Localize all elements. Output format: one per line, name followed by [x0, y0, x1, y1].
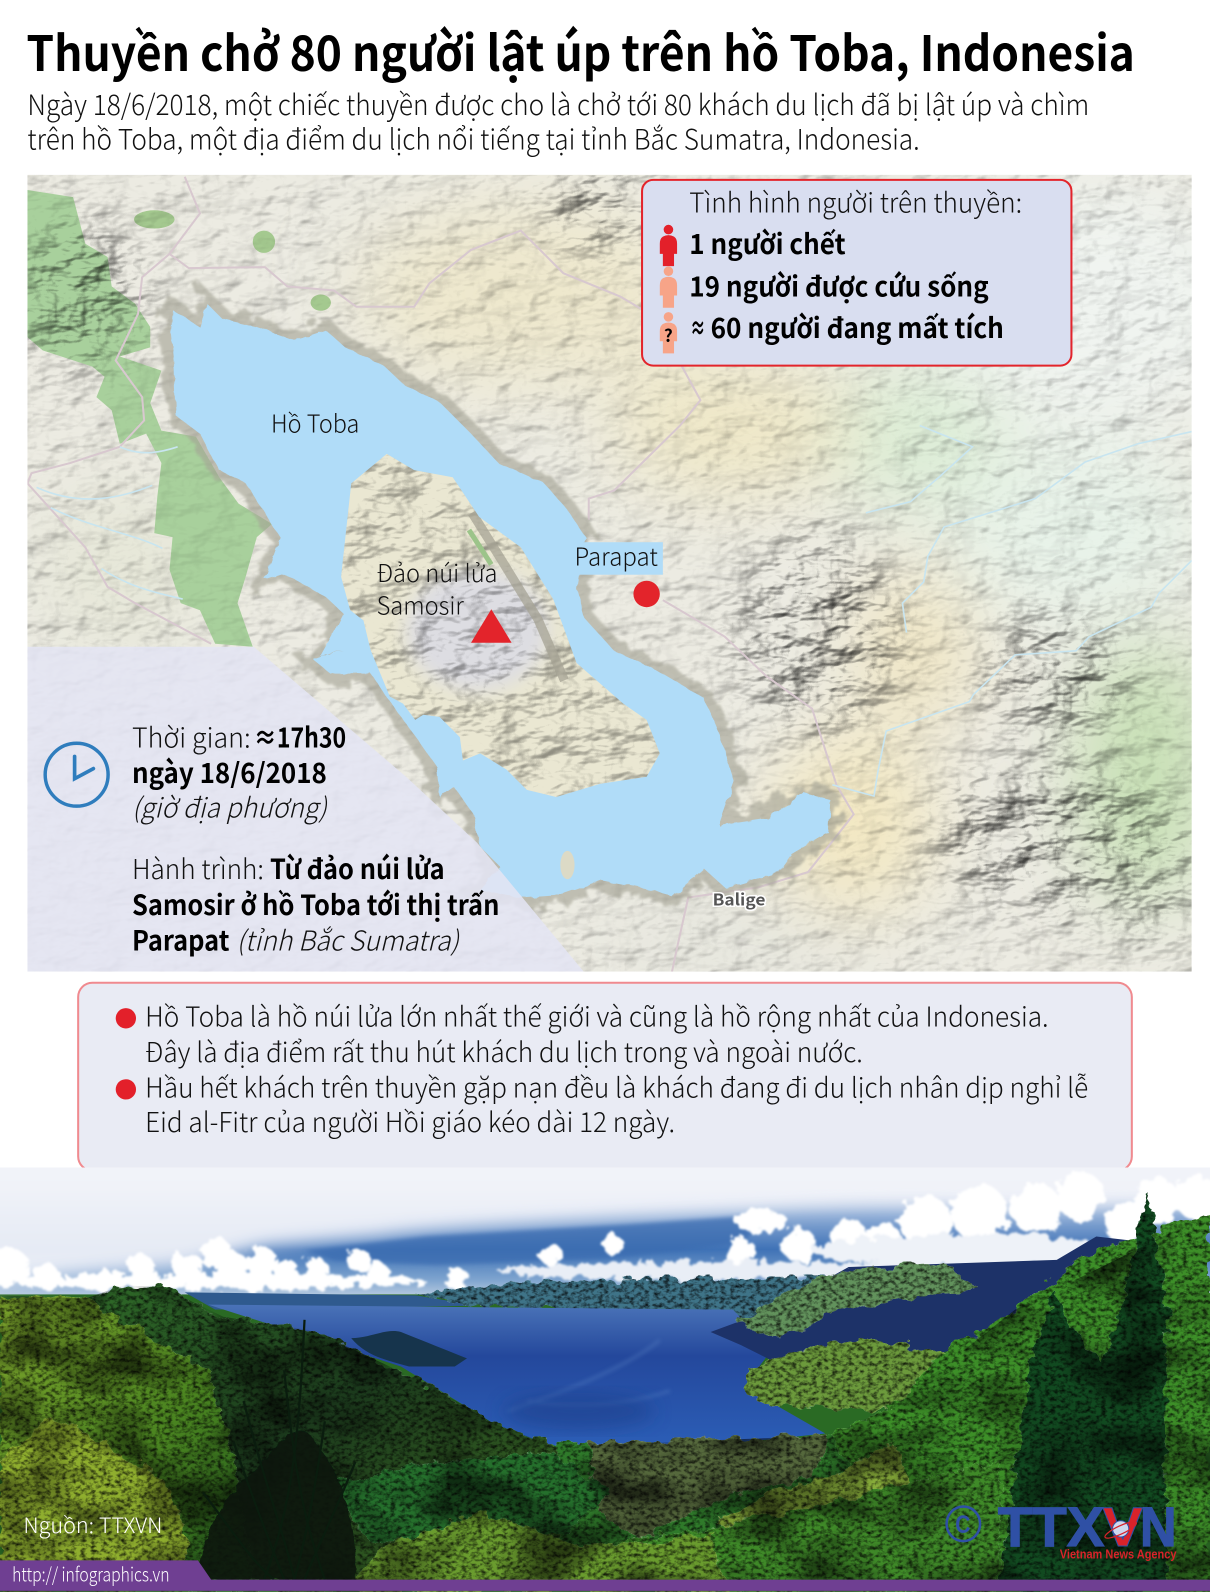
left dark hill — [92, 1285, 568, 1592]
stat: about 60 missing: ≈ — [690, 306, 705, 346]
icon: Parapat marker — [633, 581, 660, 607]
left bright hill — [0, 1295, 254, 1592]
route details: Samosir ở hồ Toba tới thị trấn — [132, 883, 499, 923]
roads — [27, 177, 854, 972]
logo: TTXVN: TTX — [998, 1495, 1104, 1558]
logo: TTXVN: N — [1140, 1495, 1177, 1558]
map label: Hồ Toba: Hồ Toba — [271, 406, 359, 441]
fact: world's largest volcanic lake: Hồ Toba là hồ núi lửa lớn nhất thế giới và cũng là hồ rộng nhất của Indonesia. — [145, 994, 1049, 1034]
intro text: Ngày 18/6/2018, một chiếc thuyền được cho là chở tới 80 khách du lịch đã bị lật úp và chìm — [27, 83, 1089, 124]
upper cloud bank — [0, 1168, 1210, 1299]
icon: missing person: ? — [664, 322, 673, 347]
panel heading: Tình hình người trên thuyền: — [689, 180, 1022, 220]
time details: ≈17h30 — [254, 715, 346, 755]
small headland — [351, 1331, 467, 1366]
dark trees on the right — [1000, 1193, 1167, 1592]
valley and village — [551, 1434, 850, 1547]
fact: tourists during Eid al-Fitr: Eid al-Fitr của người Hồi giáo kéo dài 12 ngày. — [145, 1100, 675, 1140]
logo: TTXVN — [947, 1495, 1177, 1561]
panel: people on the boat — [642, 180, 1071, 366]
route details: Từ đảo núi lửa — [270, 847, 445, 887]
fact: tourists during Eid al-Fitr — [145, 1065, 1088, 1140]
icon: dead person — [660, 225, 677, 266]
route details: Hành trình: — [132, 847, 264, 887]
middle green patch — [335, 1452, 609, 1543]
yellow foreground grass — [0, 1416, 188, 1580]
website: http:// infographics.vn — [12, 1560, 170, 1588]
lake surface — [208, 1305, 825, 1452]
bright slope — [714, 1442, 914, 1533]
green hill — [744, 1337, 941, 1411]
fact: tourists during Eid al-Fitr: Hầu hết khách trên thuyền gặp nạn đều là khách đang đi du lịch nhân dịp nghỉ lễ — [145, 1065, 1088, 1105]
icon: missing person — [660, 312, 677, 353]
green ridge — [345, 1513, 731, 1592]
time details: (giờ địa phương) — [132, 785, 328, 825]
icon: rescued person — [660, 266, 677, 308]
time details: Thời gian: — [132, 715, 251, 755]
right dark mountains — [711, 1237, 1132, 1360]
Samosir island — [335, 447, 670, 802]
ground shading — [0, 1208, 1210, 1592]
map label: Samosir volcanic island — [377, 555, 497, 622]
route details — [132, 847, 499, 958]
title: Thuyền chở 80 người lật úp trên hồ Toba, Indonesia — [26, 15, 1135, 86]
route details: Parapat — [132, 918, 230, 958]
lake — [171, 304, 830, 898]
source credit: Nguồn: TTXVN — [23, 1509, 162, 1540]
right forest — [812, 1213, 1210, 1592]
Parapat label background — [580, 542, 663, 575]
icon: red triangle volcano — [471, 609, 512, 643]
icon: clock — [45, 743, 108, 806]
rivers — [37, 425, 1192, 796]
grass blades — [203, 1320, 355, 1580]
footer bar — [0, 1560, 1210, 1591]
clouds — [0, 1172, 1210, 1291]
lower green slope — [568, 1462, 1000, 1592]
logo: TTXVN: V — [1102, 1495, 1143, 1558]
lower-left info overlay — [27, 647, 584, 972]
map label: Balige: Balige — [713, 887, 765, 911]
map label: Samosir volcanic island: Đảo núi lửa — [377, 555, 497, 590]
time details — [132, 715, 346, 825]
green forest zone — [27, 190, 331, 647]
small islet — [560, 851, 575, 879]
map label: Samosir volcanic island: Samosir — [377, 587, 464, 622]
bullet — [116, 1008, 136, 1028]
panel: lake facts — [78, 983, 1132, 1171]
dark bush silhouette — [198, 1431, 355, 1580]
map of Lake Toba — [27, 175, 1210, 985]
map label: Parapat: Parapat — [575, 539, 658, 574]
intro text: trên hồ Toba, một địa điểm du lịch nổi tiếng tại tỉnh Bắc Sumatra, Indonesia. — [27, 117, 920, 158]
logo: TTXVN: Vietnam News Agency — [1060, 1546, 1177, 1561]
blue sky patch — [305, 1214, 771, 1265]
stat: about 60 missing: 60 người đang mất tích — [711, 306, 1004, 346]
stat: 19 rescued: 19 người được cứu sống — [689, 265, 989, 305]
village houses — [589, 1436, 827, 1538]
lake shore relief — [171, 304, 830, 898]
photo of Lake Toba — [0, 1137, 1210, 1592]
time details: ngày 18/6/2018 — [132, 751, 327, 791]
intro text — [27, 83, 1089, 158]
far shore — [185, 1292, 478, 1310]
route details: (tỉnh Bắc Sumatra) — [237, 918, 460, 958]
fact: world's largest volcanic lake: Đây là địa điểm rất thu hút khách du lịch trong và ngoài nước. — [145, 1030, 863, 1070]
logo: TTXVN: C — [955, 1511, 970, 1539]
bullet — [116, 1079, 136, 1100]
stat: 1 dead: 1 người chết — [689, 222, 846, 262]
distant cliffs — [416, 1276, 832, 1317]
fact: world's largest volcanic lake — [145, 994, 1049, 1070]
